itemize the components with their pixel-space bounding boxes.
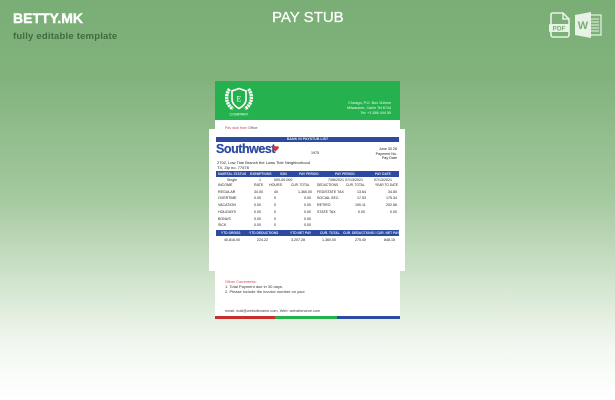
earnings table: 34.50	[388, 190, 397, 194]
employee column labels: MARITAL STATUS	[218, 172, 246, 176]
totals labels: YTD DEDUCTIONS	[249, 231, 278, 235]
table header: employee	[216, 171, 399, 176]
contact line: email: mail@websitename.com, Web: websitename.com	[225, 309, 320, 313]
earnings table: 0.00	[254, 210, 261, 214]
earnings table: RATE	[254, 183, 263, 187]
icon: heart	[272, 146, 279, 152]
earnings table: SOCIAL SEC.	[317, 196, 339, 200]
tagline: fully editable template	[13, 31, 117, 42]
earnings table: 202.56	[386, 203, 397, 207]
sheet title bar	[216, 137, 399, 142]
employee column labels: PAY DATE	[375, 172, 391, 176]
icon: Word file	[575, 12, 602, 38]
totals labels: YTD GROSS	[221, 231, 240, 235]
green letterhead	[215, 81, 400, 120]
employer details: Pay Date	[382, 156, 397, 160]
employer details: Payment No.	[376, 152, 397, 156]
employee column labels	[218, 172, 391, 176]
totals labels	[221, 231, 399, 235]
other comments: Other Comments:	[225, 279, 257, 284]
employee column labels: PAY PERIOD	[299, 172, 319, 176]
panel: pay stub sheet	[209, 129, 405, 271]
employee column labels: SSN	[280, 172, 287, 176]
other comments	[225, 279, 305, 294]
icon: PDF file	[549, 12, 570, 38]
date mark: 1975	[311, 151, 319, 155]
employee values: 07/13/2021	[374, 178, 392, 182]
employee values: 7/06/2021 07/13/2021	[328, 178, 363, 182]
employee address	[217, 160, 310, 170]
earnings table: 0.00	[304, 203, 311, 207]
company address	[347, 101, 391, 115]
employee column labels: PAY PERIOD	[335, 172, 355, 176]
panel: back page	[215, 81, 400, 319]
earnings table: 34.00	[254, 190, 263, 194]
totals labels: YTD NET PAY	[290, 231, 311, 235]
earnings table: 0.00	[304, 223, 311, 227]
earnings table: 0	[274, 210, 276, 214]
employee column labels: EXEMPTIONS	[250, 172, 272, 176]
earnings table: 0.00	[390, 210, 397, 214]
earnings table: RETIRO	[317, 203, 331, 207]
totals values	[224, 238, 395, 242]
earnings table: CUR. TOTAL	[291, 183, 310, 187]
earnings table: VACATION	[218, 203, 236, 207]
totals values: 275.40	[355, 238, 366, 242]
earnings table: SICK	[218, 223, 226, 227]
earnings table: 0	[274, 203, 276, 207]
earnings table: 40	[274, 190, 278, 194]
earnings table: 0.00	[304, 210, 311, 214]
earnings table: OVERTIME	[218, 196, 237, 200]
employee address: 2702, Low Tide Branch the Lows Tide Neighborhood	[217, 160, 310, 165]
icon: Word file: W	[578, 20, 589, 32]
earnings table: HOURS	[269, 183, 282, 187]
earnings table: YEAR TO DATE	[375, 183, 398, 187]
employee values: 1	[259, 178, 261, 182]
employee address: TX, Zip no. 77578	[217, 164, 249, 170]
icon: crest emblem	[224, 88, 254, 116]
sheet title bar: BANK IN PAYSTUB LIST	[287, 137, 328, 141]
other comments: 1. Total Payment due in 30 days.	[225, 284, 283, 289]
title: PAY STUB	[272, 9, 344, 26]
earnings table: 0.00	[254, 217, 261, 221]
earnings table: BONUS	[218, 217, 231, 221]
employer details	[376, 147, 397, 160]
earnings table	[218, 183, 398, 227]
earnings table: 1,360.00	[298, 190, 312, 194]
other comments: 2. Please include the invoice number on your	[225, 289, 305, 294]
brand logo: BETTY.MK	[13, 10, 83, 26]
earnings table: 0.00	[304, 196, 311, 200]
earnings table: HOLIDAYS	[218, 210, 236, 214]
earnings table: 190.11	[355, 203, 366, 207]
earnings table: 0.00	[254, 196, 261, 200]
totals values: 3,207.28	[291, 238, 305, 242]
earnings table: INCOME	[218, 183, 232, 187]
totals values: 1,360.00	[322, 238, 336, 242]
earnings table: 175.34	[386, 196, 397, 200]
earnings table: REGULAR	[218, 190, 235, 194]
earnings table: FED/STATE TAX	[317, 190, 344, 194]
totals labels: CUR. TOTAL	[320, 231, 340, 235]
totals labels: CUR. DEDUCTIONS / CUR. NET PAY	[343, 231, 399, 235]
icon: crest emblem: E	[237, 94, 242, 104]
employee values	[227, 178, 392, 182]
earnings table: 0	[274, 196, 276, 200]
totals values: 848.15	[384, 238, 395, 242]
red note: Pay stub from Office	[225, 126, 258, 130]
earnings table: 0.00	[254, 223, 261, 227]
employee values: 000-00-000	[274, 178, 292, 182]
earnings table: STATE TAX	[317, 210, 336, 214]
totals values: 224.22	[257, 238, 268, 242]
company address: Milwaukee, Carlie Tel 6744	[347, 106, 391, 110]
earnings table: 0	[274, 217, 276, 221]
earnings table: DEDUCTIONS	[317, 183, 338, 187]
earnings table: 13.64	[357, 190, 366, 194]
earnings table: 0.00	[358, 210, 365, 214]
earnings table: 0.00	[304, 217, 311, 221]
earnings table: 17.53	[357, 196, 366, 200]
icon: PDF file: PDF	[552, 26, 566, 33]
totals header	[216, 230, 399, 236]
footer color stripe	[215, 316, 400, 319]
employer details: June 30 26	[379, 147, 397, 151]
totals values: 40,816.00	[224, 238, 240, 242]
company address: Tel: +1 589 444 55	[361, 111, 391, 115]
company address: Chicago, P.O. Box 118mm	[348, 101, 391, 105]
earnings table: CUR. TOTAL	[346, 183, 365, 187]
employee values: Single	[227, 178, 237, 182]
earnings table: 0	[274, 223, 276, 227]
Southwest logo: Southwest	[216, 142, 275, 156]
earnings table: 0.00	[254, 203, 261, 207]
icon: crest emblem: COMPANY	[230, 112, 249, 116]
